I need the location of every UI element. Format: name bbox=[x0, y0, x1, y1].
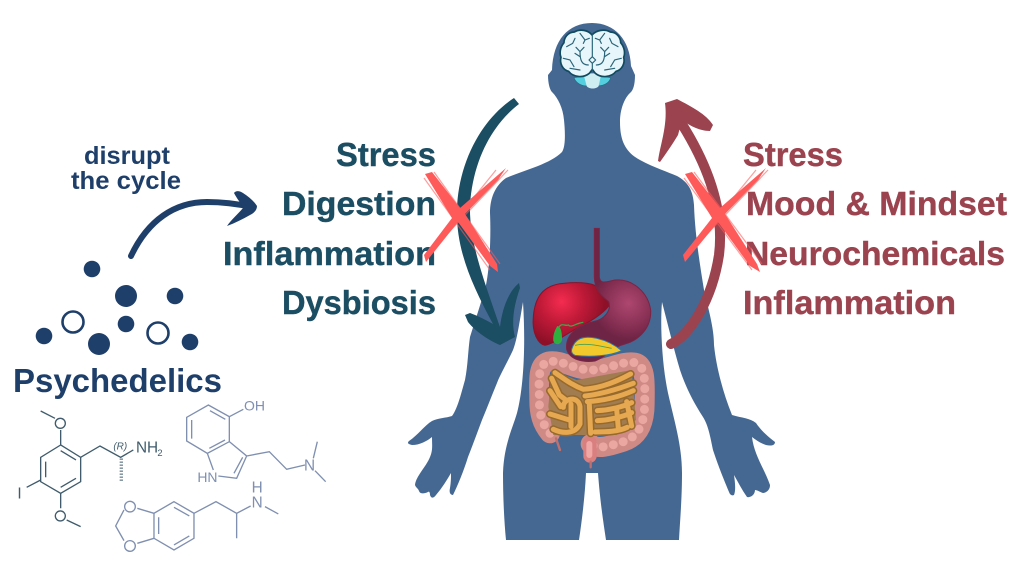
label: Mood and Mindset: Mood & Mindset bbox=[746, 185, 1007, 222]
right list: brain signals bbox=[743, 136, 1007, 321]
label: Stress: Stress bbox=[743, 136, 843, 173]
digestive organs bbox=[533, 228, 651, 467]
caption: disrupt the cycle: the cycle bbox=[71, 167, 181, 195]
arrow: disrupt bbox=[131, 191, 257, 256]
caption: disrupt the cycle bbox=[71, 142, 181, 195]
brain stem bbox=[583, 73, 601, 88]
arrow: brain to gut bbox=[457, 98, 520, 345]
molecule: psilocin: N bbox=[304, 458, 315, 475]
pancreas bbox=[571, 337, 622, 356]
molecule: DOI bbox=[17, 411, 163, 527]
large intestine bbox=[539, 361, 645, 467]
right red cross bbox=[683, 168, 768, 272]
gallbladder bbox=[553, 322, 583, 344]
label: Digestion: Digestion bbox=[282, 185, 436, 222]
label: Stress: Stress bbox=[336, 136, 436, 173]
molecule: DOI: I bbox=[17, 485, 22, 502]
left list: gut signals bbox=[223, 136, 436, 321]
icon: brain bbox=[560, 30, 625, 88]
molecule: MDMA: N bbox=[252, 494, 263, 511]
left red cross bbox=[424, 168, 508, 272]
heading: Psychedelics: Psychedelics bbox=[13, 362, 222, 399]
label: Inflammation: Inflammation bbox=[223, 235, 436, 272]
arrow: gut to brain bbox=[658, 99, 720, 344]
stomach and esophagus bbox=[567, 228, 651, 361]
brain hemispheres bbox=[560, 30, 625, 77]
molecule: psilocin bbox=[187, 398, 326, 485]
label: Dysbiosis: Dysbiosis bbox=[282, 284, 436, 321]
molecule dots bbox=[36, 261, 198, 355]
brain folds bbox=[563, 33, 621, 70]
caption: disrupt the cycle: disrupt bbox=[84, 142, 171, 170]
molecule: DOI: NH bbox=[136, 440, 158, 457]
molecule: psilocin: OH bbox=[244, 398, 265, 414]
label: Neurochemicals: Neurochemicals bbox=[745, 235, 1005, 272]
human body silhouette bbox=[408, 23, 775, 540]
molecule: DOI: (R) bbox=[113, 441, 127, 452]
liver bbox=[533, 283, 610, 345]
molecule: DOI: 2 bbox=[157, 448, 163, 458]
brain cerebellum bbox=[574, 76, 611, 86]
molecule: MDMA bbox=[116, 479, 278, 551]
molecule: psilocin: HN bbox=[197, 469, 218, 485]
molecule: MDMA: H bbox=[252, 479, 263, 496]
label: Inflammation: Inflammation bbox=[743, 284, 956, 321]
small intestine bbox=[548, 370, 636, 435]
